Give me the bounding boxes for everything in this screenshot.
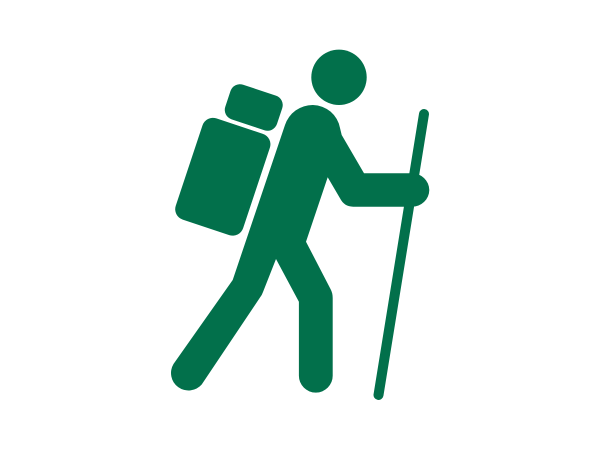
icon: backpack main body <box>172 115 273 239</box>
icon: head <box>311 50 367 105</box>
icon: walking stick <box>378 114 424 395</box>
icon: body, arm and legs <box>171 105 429 393</box>
icon: backpack top roll <box>222 82 285 133</box>
